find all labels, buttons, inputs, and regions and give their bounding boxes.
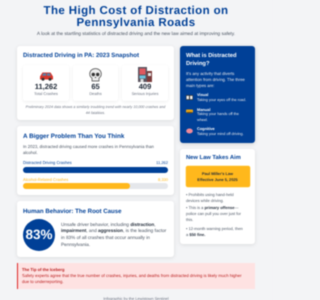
- value: 409: [139, 82, 151, 91]
- icon: hospital: [137, 66, 153, 83]
- label: distracted: Distracted Driving Crashes: [23, 160, 72, 165]
- paragraph: It's any activity that diverts: [186, 71, 234, 76]
- bar: distracted: [23, 167, 168, 173]
- bullet: hand-held: [186, 192, 234, 204]
- value: alcohol: 8,330: [158, 176, 168, 182]
- paragraph: Pennsylvania.: [61, 242, 90, 247]
- description: wheel.: [197, 118, 208, 122]
- stat circle: 83%: [23, 219, 55, 251]
- bullet: primary offense: police can pull you over just for: [186, 211, 241, 216]
- panel: what is distracted driving: [180, 46, 255, 143]
- stat: total crashes: [23, 65, 69, 101]
- stat: deaths: [73, 65, 118, 101]
- panel: bigger problem: [17, 126, 174, 195]
- bullet: warning period: a $50 fine.: [186, 232, 205, 237]
- paragraph: [185, 71, 246, 88]
- heading: what is: What is Distracted: [186, 52, 237, 58]
- heading: The Tip of the Iceberg: [22, 267, 64, 272]
- heading: bigger problem: A Bigger Problem Than You Think: [23, 132, 124, 140]
- icon: eyes: [186, 94, 194, 100]
- title: Pennsylvania Roads: [76, 17, 196, 29]
- paragraph: main types are:: [186, 83, 214, 88]
- callout: Paul Miller's Law: [186, 166, 250, 187]
- paragraph: [60, 222, 167, 248]
- label: Cognitive: [197, 126, 215, 131]
- note: Preliminary 2024 data shows a similarly troubling trend with nearly 10,000 crashes and: [26, 104, 165, 108]
- paragraph: alcohol.: [23, 150, 38, 154]
- panel: 2023 snapshot: [17, 46, 174, 120]
- label: Total Crashes: [34, 91, 58, 96]
- title: The High Cost of Distraction on: [44, 5, 228, 17]
- text: Safety experts agree that the true number of crashes, injuries, and deaths from distracted driving is likely much higher: [22, 272, 241, 278]
- heading: snapshot: Distracted Driving in PA: 2023 Snapshot: [23, 52, 139, 58]
- stat circle: 83%: 83%: [25, 227, 53, 242]
- type: manual: [185, 106, 240, 122]
- type: cognitive: [186, 126, 244, 136]
- label: Visual: [197, 92, 208, 97]
- bar: alcohol: [23, 183, 130, 189]
- description: Taking your eyes off the road.: [197, 98, 246, 102]
- note: 44 fatalities.: [86, 110, 105, 114]
- icon: car: [39, 72, 54, 82]
- bullet: warning period: [186, 226, 244, 237]
- bullet: primary offense: • This is a primary offense—: [186, 205, 238, 210]
- note: [25, 104, 166, 114]
- type: visual: [186, 92, 246, 102]
- text: [22, 272, 242, 284]
- paragraph: attention from driving. The three: [186, 77, 245, 82]
- subtitle: A look at the startling statistics of distracted driving and the new law aimed at improving safety.: [37, 32, 235, 36]
- paragraph: Unsafe driver behavior, including distraction,: [61, 222, 156, 226]
- paragraph: [22, 144, 154, 155]
- callout: Paul Miller's Law: Effective June 5, 2025: [197, 176, 238, 182]
- paragraph: impairment, and aggression, is the leading factor: [61, 228, 166, 233]
- title: [42, 4, 228, 30]
- bar: alcohol track: [23, 183, 168, 189]
- text: due to underreporting.: [22, 279, 64, 284]
- description: [196, 112, 240, 122]
- value: distracted: 11,262: [156, 160, 168, 165]
- heading: what is: [185, 52, 237, 67]
- value: 11,262: [35, 82, 57, 91]
- label: Manual: [197, 106, 210, 112]
- bullets: [186, 192, 244, 237]
- label: Deaths: [89, 91, 102, 96]
- heading: new law: New Law Takes Aim: [186, 155, 241, 161]
- label: alcohol: Alcohol-Related Crashes: [23, 176, 68, 182]
- stat: serious injuries: [122, 65, 168, 101]
- bullet: primary offense: [186, 205, 242, 222]
- description: Taking your mind off driving.: [197, 132, 244, 136]
- heading: what is: Driving?: [186, 60, 210, 66]
- label: Serious Injuries: [132, 91, 158, 96]
- bullet: warning period: • 12-month warning period, then: [186, 226, 243, 231]
- callout: tip of the iceberg: [17, 263, 255, 288]
- paragraph: in 83% of all crashes that occur annually in: [61, 235, 150, 240]
- icon: skull: [88, 68, 102, 82]
- value: 65: [91, 82, 100, 91]
- callout: Paul Miller's Law: Paul Miller's Law: [202, 170, 233, 176]
- panel: human behavior: [17, 201, 174, 257]
- bar chart: [22, 160, 169, 190]
- bullet: hand-held: • Prohibits using hand-held: [186, 192, 234, 196]
- panel: new law: [180, 149, 255, 244]
- bullet: primary offense: this.: [186, 217, 193, 222]
- description: Taking your hands off the: [197, 112, 239, 116]
- icon: hand: [185, 108, 194, 114]
- icon: brain: [186, 128, 194, 134]
- bullet: hand-held: devices while driving.: [186, 198, 224, 203]
- paragraph: In 2023, distracted driving caused more crashes in Pennsylvania than: [23, 144, 154, 148]
- heading: root cause: Human Behavior: The Root Cause: [23, 208, 122, 214]
